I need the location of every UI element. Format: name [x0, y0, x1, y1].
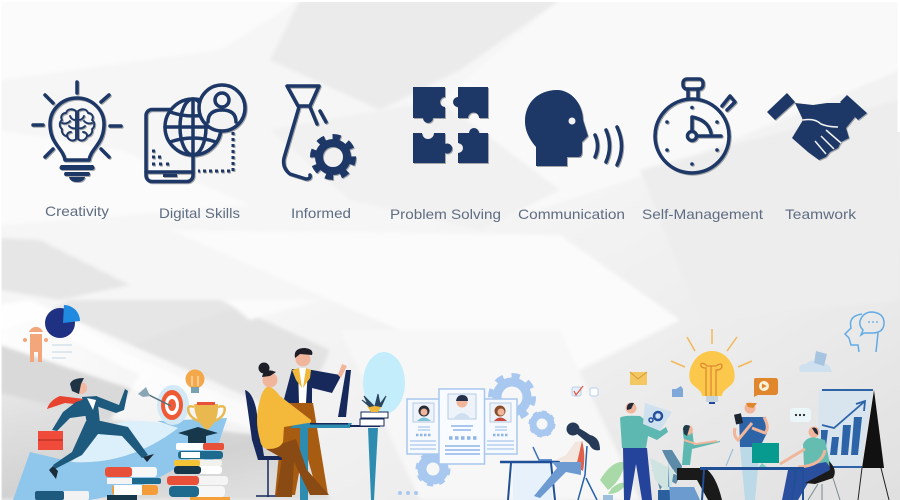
target and arrow	[138, 385, 189, 425]
labels: Digital Skills	[159, 205, 240, 221]
cv card left	[407, 399, 440, 454]
orange bulb	[186, 370, 204, 393]
gears	[418, 376, 554, 484]
standing man	[734, 402, 767, 500]
chart lines	[52, 345, 72, 358]
egg shape	[363, 352, 405, 414]
icon: puzzle pieces	[413, 87, 488, 163]
cv card right	[484, 399, 517, 454]
icon: handshake	[767, 93, 867, 160]
trophy	[188, 402, 225, 430]
cloud and document	[799, 351, 832, 372]
labels: Self-Management	[642, 206, 763, 222]
graduation cap	[178, 427, 218, 443]
labels: Informed	[291, 205, 351, 221]
book stacks	[35, 443, 230, 500]
meeting table	[700, 467, 804, 500]
illustration: runner and books	[13, 305, 230, 500]
teal monitor	[752, 443, 779, 468]
speech bubble dots	[790, 408, 811, 422]
labels: Teamwork	[785, 206, 857, 222]
man with paper	[620, 402, 672, 500]
monitor	[338, 370, 351, 417]
icon: tie and gear	[284, 86, 352, 179]
video bubble	[754, 378, 778, 397]
labels: Creativity	[45, 203, 109, 219]
icon: lightbulb with brain	[33, 82, 121, 182]
check boxes	[572, 386, 598, 396]
books and plant	[360, 394, 388, 426]
labels: Problem Solving	[390, 206, 501, 222]
icon: digital skills phone, globe and user	[146, 85, 245, 182]
envelope	[630, 372, 647, 385]
seated woman	[668, 425, 733, 500]
woman at laptop	[500, 422, 600, 500]
thumbs up	[672, 386, 683, 397]
desk	[290, 423, 380, 500]
dots	[398, 491, 418, 495]
runner	[38, 378, 154, 479]
icon: stopwatch	[655, 79, 735, 173]
blue arrow	[13, 418, 227, 500]
labels: Communication	[518, 206, 625, 222]
icon: speaking head	[525, 90, 622, 166]
easel chart	[817, 389, 889, 500]
standing man	[275, 348, 347, 495]
illustration: meeting team	[600, 312, 889, 500]
cv card centre	[439, 389, 484, 464]
head with speech outline	[845, 312, 884, 352]
plants	[600, 450, 682, 500]
small person	[23, 327, 48, 362]
yellow idea bulb	[671, 329, 752, 403]
icon row	[33, 79, 867, 182]
illustration: office desk team	[245, 348, 600, 500]
seated woman	[245, 362, 329, 497]
seated man	[780, 426, 840, 500]
labels	[45, 203, 857, 222]
pie chart	[45, 305, 80, 338]
